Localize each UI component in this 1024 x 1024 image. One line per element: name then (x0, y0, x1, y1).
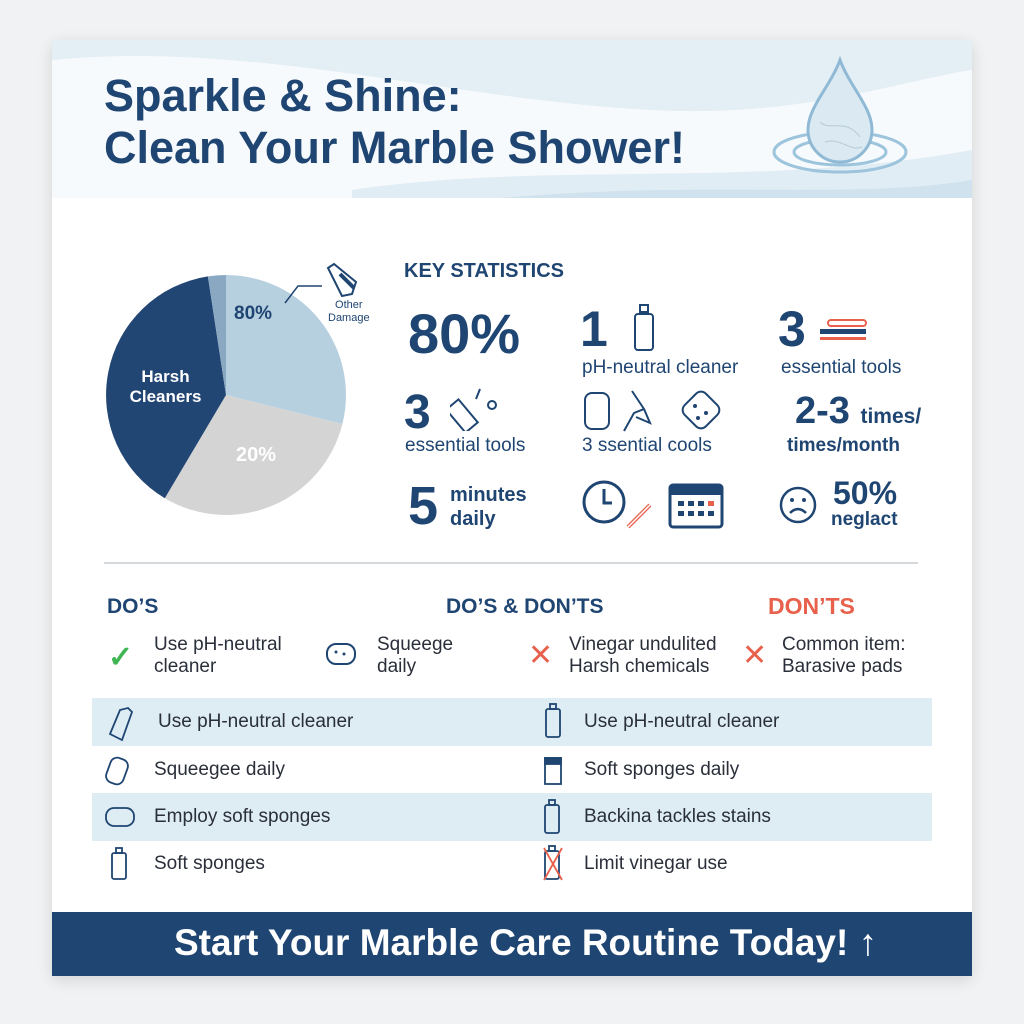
tips table: Employ soft sponges (154, 806, 330, 827)
stat tools icons: 3 ssential cools (582, 435, 712, 456)
tips table: Squeegee daily (154, 759, 285, 780)
stat 50% neglect: neglact (831, 509, 898, 530)
tips table: Soft sponges (154, 853, 265, 874)
title: Sparkle & Shine: (104, 70, 462, 121)
title (104, 70, 685, 173)
don'ts heading: DON’TS (768, 593, 855, 619)
stat 2-3 times: 2-3 times/ (795, 390, 921, 432)
stat 3 essential tools (404, 386, 525, 456)
key statistics heading: KEY STATISTICS (404, 260, 564, 282)
header band (52, 40, 972, 198)
stat 5 minutes: daily (450, 508, 496, 530)
stats grid (404, 301, 921, 536)
quick tips row: Vinegar undulited (569, 634, 717, 655)
quick tips row: cleaner (154, 656, 216, 677)
stat 5 minutes: minutes (450, 484, 527, 506)
do's & don'ts heading: DO’S & DON’TS (446, 595, 604, 618)
text: Damage (328, 312, 370, 324)
quick tips row (108, 634, 906, 677)
quick tips row: ✕ (528, 639, 553, 672)
stat 3 essential tools: 3 (404, 386, 431, 439)
stat 5 minutes: 5 (408, 476, 438, 536)
table icons (105, 703, 563, 880)
text: 20% (236, 444, 276, 466)
stat 1 cleaner: pH-neutral cleaner (582, 357, 738, 378)
quick tips row: Squeege (377, 634, 453, 655)
tips table (92, 698, 932, 880)
tips table: Soft sponges daily (584, 759, 739, 780)
do's heading: DO’S (107, 595, 158, 618)
quick tips row: daily (377, 656, 416, 677)
footer text: Start Your Marble Care Routine Today! ↑ (174, 922, 877, 963)
pie labels: 80% (234, 303, 272, 324)
stat 3 tools: 3 (778, 301, 806, 357)
stat 3 tools: essential tools (781, 357, 901, 378)
stat 1 cleaner (580, 301, 738, 378)
title: Clean Your Marble Shower! (104, 122, 685, 173)
text: Cleaners (130, 387, 201, 406)
stat 80%: 80% (408, 302, 520, 365)
stat 1 cleaner: 1 (580, 301, 608, 357)
right column: Use pH-neutral cleaner (584, 711, 779, 732)
stat 2-3 times (787, 390, 921, 456)
icon: bottle spray (326, 262, 358, 298)
left column: Use pH-neutral cleaner (158, 711, 353, 732)
quick tips row: ✕ (742, 639, 767, 672)
stat 50% neglect: 50% (833, 475, 897, 511)
stat 50% neglect (780, 475, 898, 530)
stat clock calendar (582, 480, 724, 528)
pie chart (106, 275, 346, 515)
footer banner (52, 912, 972, 976)
quick tips row: Harsh chemicals (569, 656, 709, 677)
tips table: Limit vinegar use (584, 853, 728, 874)
text: Other (335, 299, 363, 311)
quick tips row: ✓ (108, 641, 133, 674)
stat tools icons (582, 390, 720, 456)
quick tips row: Common item: (782, 634, 906, 655)
quick tips row: Use pH-neutral (154, 634, 282, 655)
text: Harsh (141, 367, 190, 386)
quick tips row: Barasive pads (782, 656, 902, 677)
icon: water drop (772, 56, 908, 174)
tips table: Backina tackles stains (584, 806, 771, 827)
stat 3 essential tools: essential tools (405, 435, 525, 456)
stat 2-3 times: times/month (787, 435, 900, 456)
stat 3 tools (778, 301, 901, 378)
stat 5 minutes (408, 476, 527, 536)
